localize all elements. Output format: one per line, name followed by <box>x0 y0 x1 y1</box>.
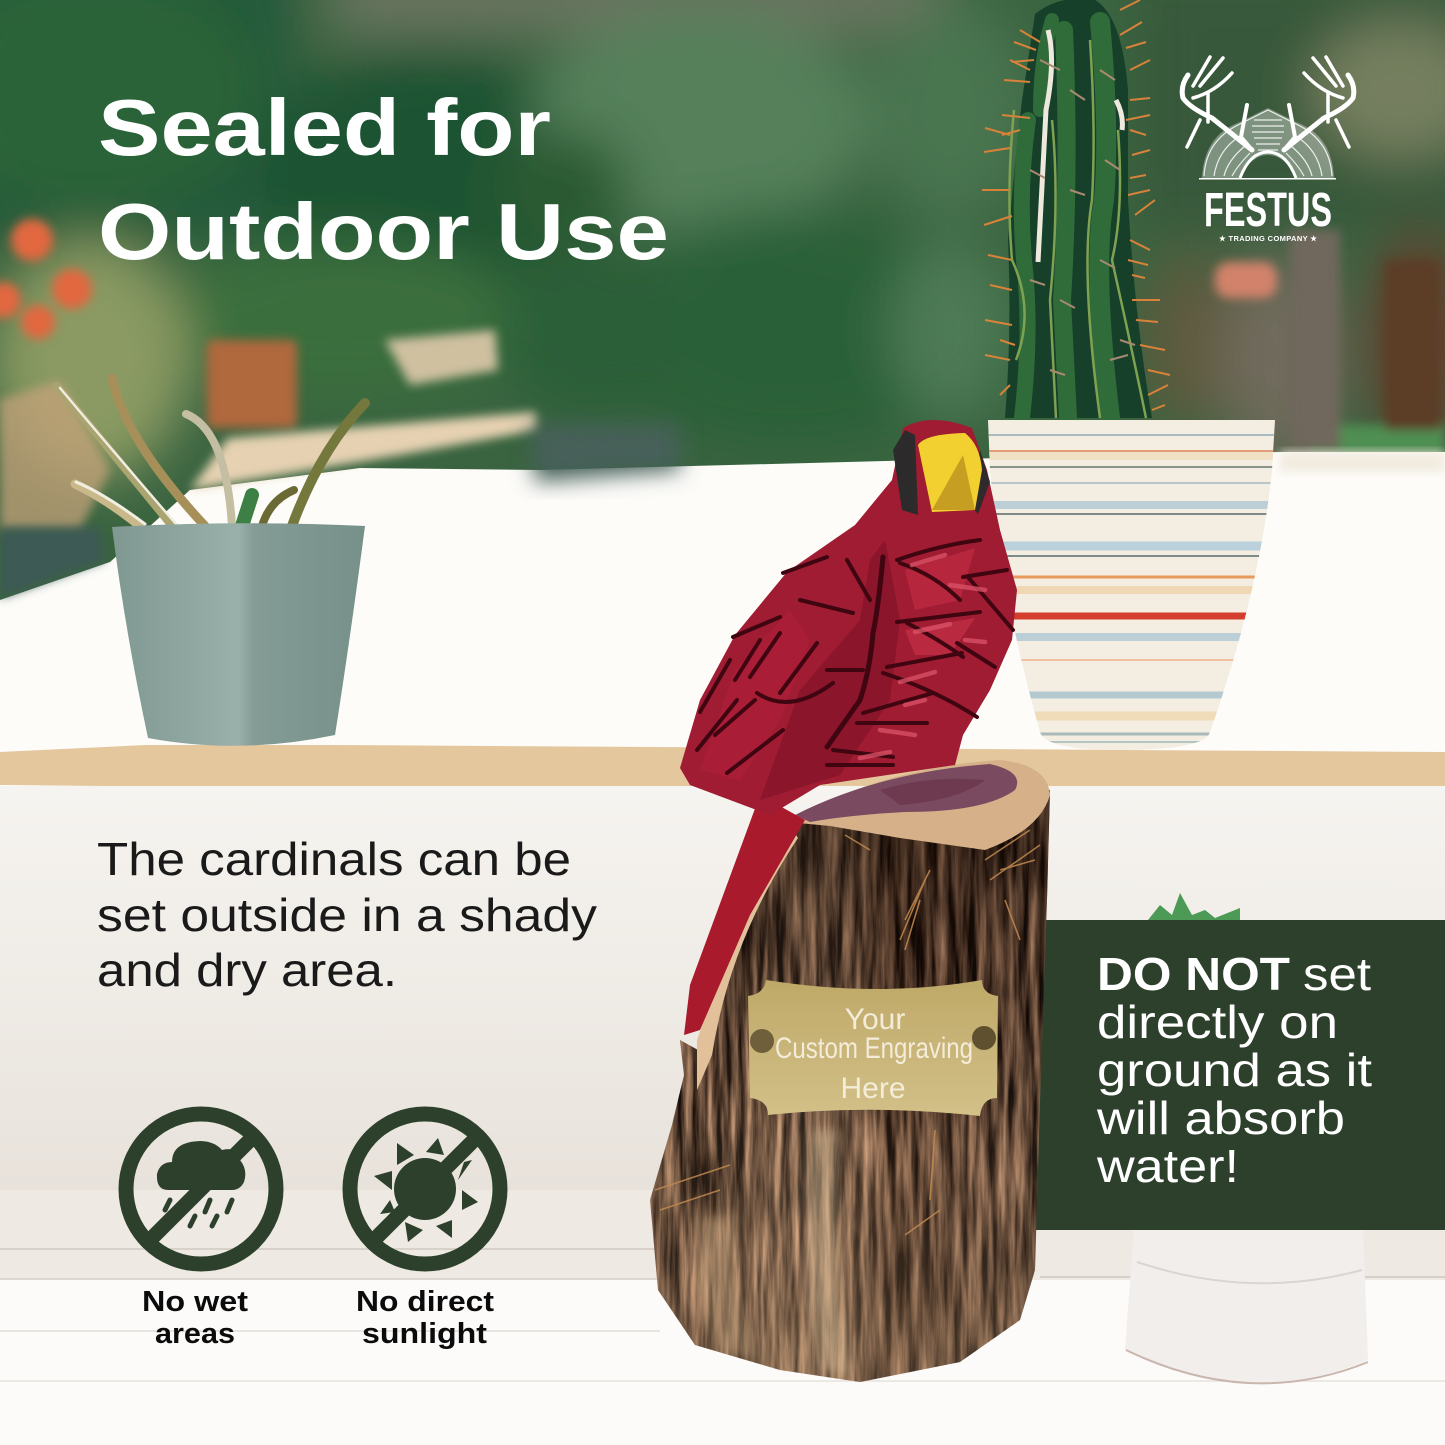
callout text <box>1096 948 1372 1192</box>
icon label: no wet areas: No wet <box>142 1286 248 1318</box>
tail <box>684 795 805 1035</box>
callout text: directly on <box>1097 996 1338 1048</box>
body text: The cardinals can be <box>97 833 571 885</box>
black face mask <box>893 430 918 515</box>
cactus <box>982 0 1170 418</box>
callout text: set <box>1303 948 1371 1000</box>
brass engraved plate <box>748 980 998 1116</box>
rivets <box>750 1026 996 1053</box>
icon: no wet areas <box>126 1114 276 1264</box>
cactus spines <box>982 0 1170 410</box>
sage green pot <box>112 523 365 746</box>
white floor planks <box>0 1190 1445 1445</box>
engraving text: Custom Engraving <box>775 1032 973 1065</box>
stump top cut <box>788 760 1050 850</box>
aloe plant <box>57 378 365 526</box>
icon label: no direct sunlight: No direct <box>356 1286 494 1318</box>
blurred garden background <box>0 0 1445 650</box>
dark green callout panel <box>1034 920 1445 1230</box>
white pot with plant <box>1125 893 1368 1383</box>
engraving text: Here <box>840 1072 906 1105</box>
body text: set outside in a shady <box>97 889 597 941</box>
icon label: no wet areas <box>142 1286 248 1350</box>
stump left torn edge <box>697 825 798 1090</box>
body <box>680 420 1017 815</box>
striped ceramic pot <box>985 420 1280 750</box>
body text: and dry area. <box>97 944 397 996</box>
wall <box>0 786 1445 1193</box>
icon label: no direct sunlight <box>356 1286 494 1350</box>
callout text: will absorb <box>1096 1092 1345 1144</box>
callout text: water! <box>1096 1140 1239 1192</box>
white terrace <box>0 412 1445 760</box>
logo turkey fan <box>1202 108 1334 178</box>
callout text: ground as it <box>1097 1044 1372 1096</box>
body text <box>97 833 597 996</box>
logo wordmark: FESTUS <box>1204 184 1332 237</box>
title: Outdoor Use <box>98 187 669 276</box>
icon label: no wet areas: areas <box>155 1318 235 1350</box>
title: Sealed for <box>98 83 551 172</box>
callout text: DO NOT <box>1097 948 1290 1000</box>
engraving text <box>775 1003 973 1105</box>
icon label: no direct sunlight: sunlight <box>362 1318 487 1350</box>
tan ledge <box>0 745 1445 792</box>
logo antlers <box>1182 57 1354 150</box>
festus logo <box>1182 57 1354 243</box>
feather carving lines <box>697 540 1013 773</box>
engraving text: Your <box>845 1003 905 1036</box>
icon: no direct sunlight <box>350 1114 500 1264</box>
yellow beak <box>918 433 982 512</box>
wooden stump <box>645 760 1055 1390</box>
title <box>98 83 669 276</box>
carved red cardinal <box>680 420 1017 1035</box>
festus logo: ★ TRADING COMPANY ★ <box>1219 234 1318 243</box>
